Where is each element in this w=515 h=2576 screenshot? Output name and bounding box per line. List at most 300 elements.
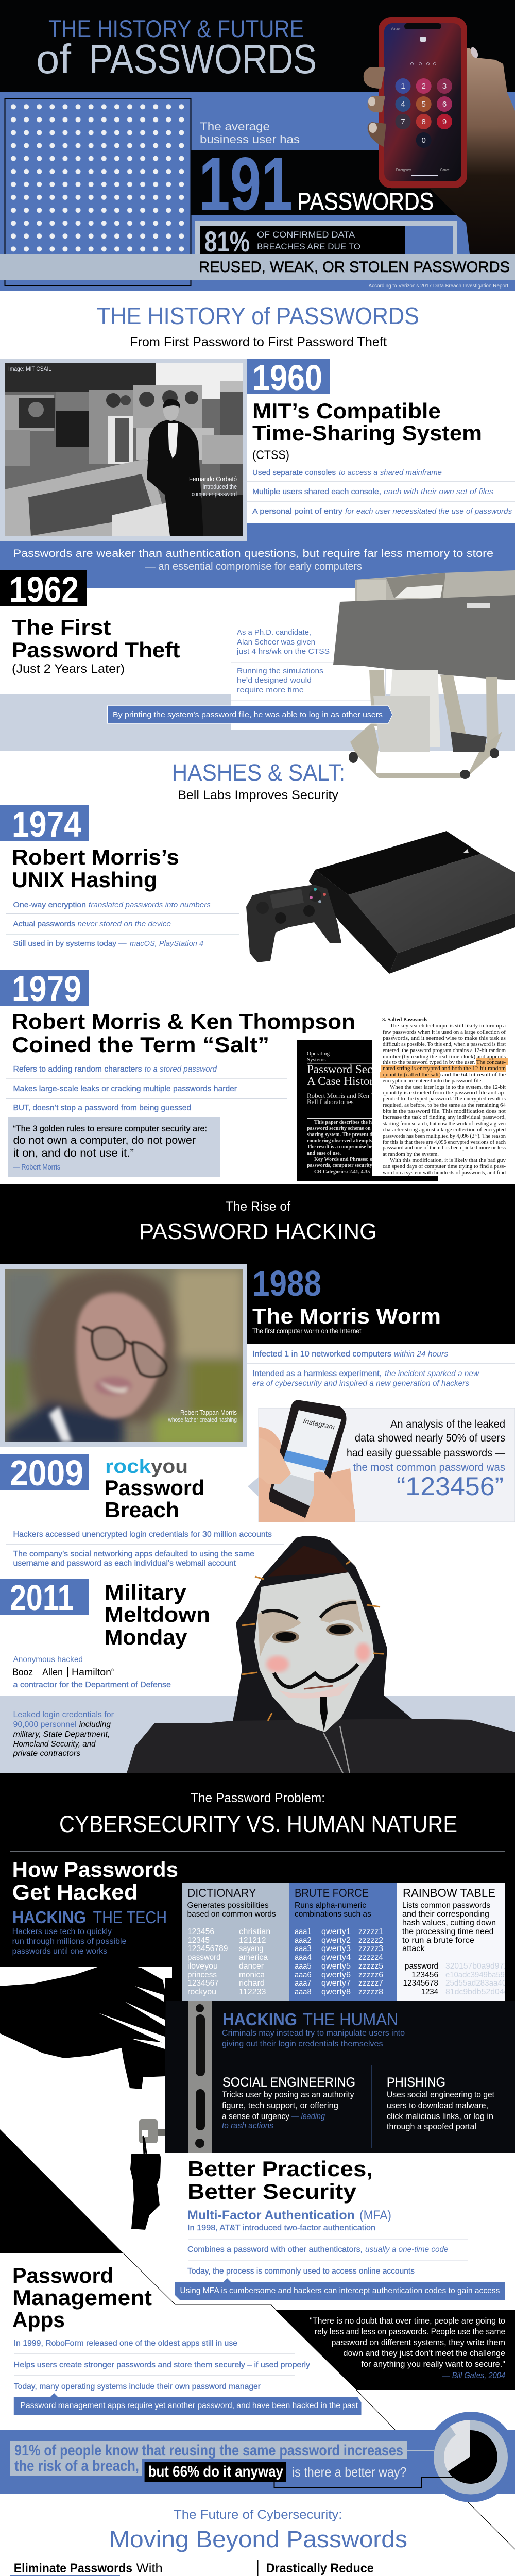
text: hacking the tech: [12, 1908, 167, 1956]
column: rainbow table: Lists common passwords: [402, 1901, 490, 1910]
bullets: mfa: usually a one-time code: [365, 2245, 449, 2254]
photo: hand holding phone: Instagram: [302, 1416, 336, 1431]
bullets: unix hashing: Still used in by systems today —: [13, 939, 127, 948]
photo: hand holding phone: [259, 1400, 355, 1522]
heading: cybersecurity vs human nature: CYBERSECURITY VS. HUMAN NATURE: [59, 1811, 457, 1837]
bullets: morris worm: era of cybersecurity and inspired a new generation of hackers: [252, 1379, 469, 1388]
column: brute force: aaa3: [295, 1944, 312, 1953]
quote: bill gates: password on different systems, they write them: [332, 2338, 505, 2347]
document: password security paper: passwords has been multiplied by 4,096 (2¹²). The reason: [383, 1133, 506, 1139]
document: password security paper: encryption are entered into the password file.: [383, 1078, 483, 1084]
document: password security paper: password security scheme on a remote: [307, 1126, 391, 1131]
bullets: ctss: Multiple users shared each console,: [252, 487, 381, 496]
heading: cybersecurity vs human nature: [59, 1791, 457, 1837]
stat text: 123456: An analysis of the leaked: [390, 1418, 505, 1430]
column: brute force: aaa4: [295, 1953, 312, 1962]
callout: mfa is cumbersome: Using MFA is cumbersome and hackers can intercept authentication codes to gain access: [180, 2286, 500, 2295]
document: password security paper: pended to the typed password. The encrypted result is: [383, 1096, 506, 1102]
bullets: password managers: Today, many operating systems include their own password manager: [14, 2382, 261, 2391]
panel: instagram leak stat: [248, 1400, 515, 1522]
panel: certificate-based authentication: Eliminate Passwords: [14, 2561, 132, 2575]
text: social engineering: [222, 2075, 355, 2130]
document: password security paper: starting from scratch, but now the work of testing a given: [383, 1121, 506, 1127]
caption: fernando corbato: [189, 476, 237, 498]
document: password security paper: A Case History: [307, 1075, 380, 1088]
document: password security paper: few passwords when it is used on a large collection of: [383, 1029, 506, 1036]
photo: smartphone lock screen: Emergency: [396, 168, 411, 172]
document: password security paper: When the user later logs in to the system, the 12-bit: [390, 1084, 506, 1090]
bullets: ctss: each with their own set of files: [384, 487, 494, 496]
column: dictionary: DICTIONARY: [187, 1886, 256, 1900]
heading: morris worm: 1988: [252, 1263, 321, 1303]
heading: coined salt: Robert Morris & Ken Thompson: [12, 1009, 355, 1033]
year badge: 1960: 1960: [252, 358, 322, 398]
caption: fernando corbato: computer password: [192, 490, 237, 498]
quote: robert morris: it on, and do not use it.”: [13, 1147, 134, 1159]
document: password security paper: Systems: [307, 1057, 326, 1063]
key and keychain: [130, 2119, 165, 2230]
bullets: rockyou: [6, 1530, 284, 1568]
heading: better practices better security: [187, 2157, 373, 2204]
photo: smartphone lock screen: 0: [422, 136, 426, 145]
document: password security paper: The key search technique is still likely to turn up a: [390, 1023, 506, 1029]
text: hacking the tech: run through millions of possible: [12, 1937, 127, 1946]
photo: smartphone lock screen: 1: [401, 82, 405, 91]
bullets: unix hashing: One-way encryption: [13, 901, 86, 909]
document: password security paper: [297, 1013, 515, 1181]
text: phishing: click malicious links, or log in: [387, 2112, 493, 2121]
heading: first password theft: The First: [12, 615, 111, 639]
column: brute force: Runs alpha-numeric: [295, 1901, 366, 1910]
text: hacking the human: HACKING: [222, 2010, 297, 2029]
column: rainbow table: RAINBOW TABLE: [403, 1886, 495, 1900]
title: of passwords: of: [36, 36, 72, 82]
heading: hashes and salt: [172, 759, 345, 802]
photo: smartphone lock screen: 3: [442, 82, 447, 91]
heading: unix hashing: [12, 845, 179, 892]
text: social engineering: figure, tech support, or offering: [222, 2101, 338, 2110]
text: phishing: through a spoofed portal: [387, 2122, 476, 2131]
text: anonymous hacked booz allen: [12, 1655, 171, 1689]
callout: printing the password file: [107, 706, 392, 723]
document: password security paper: nated string is encrypted and both the 12-bit random: [383, 1065, 506, 1072]
photo: anonymous mask hoodie: [127, 1536, 515, 1773]
quote: bill gates: down and they just don't meet the challenge: [343, 2349, 505, 2358]
logo: rockyou: you: [151, 1456, 188, 1478]
column: brute force: qwerty2: [321, 1936, 351, 1945]
photo credit: Image: MIT CSAIL: [8, 366, 52, 372]
column: dictionary: 121212: [239, 1936, 266, 1945]
heading: mit ctss: [252, 399, 482, 462]
year badge: 1979: 1979: [12, 969, 81, 1009]
column: brute force: qwerty8: [321, 1988, 351, 1996]
column: brute force: zzzzz1: [358, 1927, 383, 1936]
photo: smartphone lock screen: 2: [422, 82, 426, 91]
year badge: 1962: 1962: [9, 569, 79, 609]
heading: moving beyond passwords: The Future of Cybersecurity:: [174, 2507, 342, 2522]
text: hacking the human: THE HUMAN: [303, 2010, 399, 2029]
door plate: [188, 2001, 212, 2153]
photo: smartphone lock screen: [379, 17, 467, 188]
heading: password management apps: Apps: [12, 2308, 65, 2332]
document: password security paper: for this is that there are 4,096 encrypted versions of each: [383, 1139, 506, 1145]
heading: mit ctss: Time-Sharing System: [252, 421, 482, 445]
heading: how passwords get hacked: How Passwords: [12, 1857, 178, 1882]
text: the average business user has: The average: [200, 120, 270, 133]
heading: hashes and salt: HASHES & SALT:: [172, 759, 345, 786]
heading: better practices better security: Better Security: [187, 2179, 357, 2204]
bullets: rockyou: Hackers accessed unencrypted login credentials for 30 million accounts: [13, 1530, 272, 1539]
heading: morris worm: [252, 1263, 441, 1335]
text: anonymous hacked booz allen: Allen: [42, 1667, 63, 1678]
column: rainbow table: the processing time need: [402, 1927, 493, 1936]
text: phishing: Uses social engineering to get: [387, 2090, 494, 2099]
bullets: morris worm: the incident sparked a new: [385, 1369, 479, 1378]
column: brute force: zzzzz2: [358, 1936, 383, 1945]
heading: military meltdown monday: [105, 1580, 210, 1649]
document: password security paper: difficult as possible. To this end, when a password is first: [383, 1041, 506, 1047]
column: brute force: aaa8: [295, 1988, 312, 1996]
column: brute force: aaa7: [295, 1979, 312, 1988]
column: dictionary: password: [187, 1953, 220, 1962]
column: rainbow table: attack: [402, 1944, 425, 1953]
column: brute force: BRUTE FORCE: [295, 1886, 369, 1900]
heading: first password theft: (Just 2 Years Later): [12, 662, 125, 676]
column: dictionary: richard: [239, 1979, 265, 1988]
bullets: unix hashing: [6, 901, 239, 948]
text: phishing: PHISHING: [387, 2075, 445, 2090]
photo: smartphone lock screen: 8: [422, 117, 426, 126]
document: password security paper: passwords, computer security systems: [307, 1163, 390, 1168]
heading: better practices better security: Better Practices,: [187, 2157, 373, 2181]
bullets: salt: Makes large-scale leaks or cracking multiple passwords harder: [13, 1084, 237, 1093]
heading: password breach: [105, 1476, 204, 1522]
document: password security paper: required, as before, to be the same as the remaining 64: [383, 1102, 506, 1108]
column: dictionary: princess: [187, 1971, 217, 1979]
photo: smartphone lock screen: 9: [442, 117, 447, 126]
quote: robert morris: — Robert Morris: [13, 1163, 60, 1172]
text: anonymous hacked booz allen: Anonymous hacked: [13, 1655, 83, 1664]
panel: reuse statistic band: [0, 2412, 515, 2502]
text: leaked login credentials: 90,000 personnel: [13, 1720, 76, 1729]
stat text: 123456: “123456”: [397, 1472, 504, 1501]
bullets: ctss: A personal point of entry: [252, 507, 343, 516]
stat text: 123456: [347, 1418, 505, 1501]
bullets: unix hashing: never stored on the device: [77, 920, 171, 928]
stat: 81 percent of breaches: REUSED, WEAK, OR STOLEN PASSWORDS: [199, 259, 510, 276]
document: password security paper: Password Security:: [307, 1063, 398, 1076]
photo: smartphone lock screen: 7: [401, 117, 405, 126]
bullets: password managers: In 1999, RoboForm released one of the oldest apps still in use: [14, 2339, 237, 2348]
year badge: 1974: 1974: [12, 804, 81, 844]
document: password security paper: countering observed attempts to pen: [307, 1138, 387, 1144]
dot grid: 191 dots: [5, 98, 191, 286]
text: leaked login credentials: [13, 1710, 114, 1758]
document: password security paper: CR Categories: 2.41, 4.35: [314, 1169, 370, 1175]
document: password security paper: The result is a compromise between: [307, 1144, 386, 1150]
banner: memory compromise: Passwords are weaker than authentication questions, but require far less memory to store: [13, 548, 493, 560]
heading: password management apps: [12, 2263, 152, 2332]
document: password security paper: Robert Morris and Ken Thompson: [307, 1092, 400, 1099]
photo: smartphone lock screen: 5: [422, 100, 426, 109]
bullets: mfa: [187, 2245, 468, 2276]
column: brute force: qwerty6: [321, 1971, 351, 1979]
heading: moving beyond passwords: Moving Beyond Passwords: [109, 2526, 407, 2552]
banner: memory compromise: [0, 523, 515, 588]
caption: robert tappan morris: whose father created hashing: [168, 1416, 237, 1423]
bullets: password managers: Helps users create stronger passwords and store them securely – if used properly: [14, 2361, 310, 2369]
document: password security paper: number (by reading the real-time clock) and appends: [383, 1054, 506, 1060]
column: rainbow table: password: [405, 1962, 438, 1971]
stat frame: [195, 221, 457, 257]
text: hacking the tech: THE TECH: [93, 1908, 167, 1927]
bullets: mfa: Combines a password with other authenticators,: [187, 2245, 363, 2254]
text: anonymous hacked booz allen: Hamilton: [72, 1667, 111, 1678]
column: dictionary: christian: [239, 1927, 271, 1936]
column: brute force: qwerty1: [321, 1927, 351, 1936]
bullets: salt: to a stored password: [145, 1065, 217, 1074]
bullets: morris worm: [247, 1350, 515, 1388]
column: brute force: qwerty5: [321, 1962, 351, 1971]
column: dictionary: [187, 1886, 276, 1996]
text: hacking the tech: passwords until one works: [12, 1947, 107, 1956]
divider lines: diagonal: [123, 2253, 515, 2549]
card: alan scheer: require more time: [237, 686, 304, 694]
heading: cybersecurity vs human nature: The Password Problem:: [191, 1791, 325, 1805]
year badge: 2009: 2009: [10, 1453, 83, 1493]
panel: certificate-based authentication: With: [136, 2561, 163, 2575]
heading: coined salt: [12, 1009, 355, 1057]
column: brute force: zzzzz6: [358, 1971, 383, 1979]
document: password security paper: quantity (called the salt) and the 64-bit result of the: [383, 1072, 506, 1078]
column: brute force: zzzzz4: [358, 1953, 383, 1962]
bullets: morris worm: Intended as a harmless experiment,: [252, 1369, 382, 1378]
photo: playstation 4: [246, 831, 515, 974]
quote: bill gates: "There is no doubt that over time, people are going to: [310, 2316, 505, 2326]
column: dictionary: dancer: [239, 1962, 264, 1971]
stat text: 123456: data showed nearly 50% of users: [355, 1432, 505, 1444]
column: dictionary: 112233: [239, 1988, 266, 1996]
document: password security paper: sharing system. The present design: [307, 1132, 384, 1138]
stat text: 123456: the most common password was: [353, 1462, 505, 1473]
column: dictionary: 12345: [187, 1936, 210, 1945]
text: leaked login credentials: military, State Department,: [13, 1730, 110, 1739]
band: reused weak or stolen: [0, 254, 515, 280]
column: brute force: qwerty3: [321, 1944, 351, 1953]
stat: 81 percent of breaches: 81%: [204, 225, 250, 258]
column: dictionary: Generates possibilities: [187, 1901, 269, 1910]
panel: hero header: [0, 0, 515, 291]
column: brute force: zzzzz8: [358, 1988, 383, 1996]
heading: how passwords get hacked: Get Hacked: [12, 1880, 138, 1904]
heading: military meltdown monday: Meltdown: [105, 1602, 210, 1626]
heading: mit ctss: (CTSS): [252, 448, 289, 462]
text: leaked login credentials: Homeland Security, and: [13, 1740, 96, 1749]
column: rainbow table: [402, 1889, 505, 1994]
heading: password management apps: Management: [12, 2285, 152, 2310]
text: social engineering: a sense of urgency: [222, 2112, 290, 2121]
subheading: first password to first theft: From First Password to First Password Theft: [130, 335, 387, 349]
chart: pie of 91 and 66 percent: [425, 2412, 515, 2502]
text: hacking the tech: Hackers use tech to quickly: [12, 1927, 112, 1936]
bullets: mfa: Today, the process is commonly used to access online accounts: [187, 2267, 415, 2276]
panel: attack surface: Drastically Reduce: [266, 2561, 374, 2575]
text block: 91 percent know: 91% of people know that reusing the same password increases: [14, 2442, 403, 2459]
column: dictionary: 123456789: [187, 1944, 228, 1953]
caption: robert tappan morris: [168, 1409, 237, 1423]
document: password security paper: increase the task of finding any individual password,: [383, 1114, 506, 1121]
panel: cybersecurity vs human nature: [0, 1773, 515, 2253]
heading: unix hashing: Robert Morris’s: [12, 845, 179, 869]
quote: robert morris: “The 3 golden rules to ensure computer security are:: [13, 1124, 207, 1133]
text: leaked login credentials: including: [79, 1720, 111, 1729]
bullets: unix hashing: translated passwords into numbers: [89, 901, 211, 909]
source note: According to Verizon's 2017 Data Breach Investigation Report: [369, 283, 508, 289]
caption: fernando corbato: Fernando Corbató: [189, 476, 237, 483]
column: rainbow table: 12345678: [403, 1979, 438, 1988]
title: of passwords: PASSWORDS: [89, 36, 317, 82]
column: brute force: qwerty4: [321, 1953, 351, 1962]
document: password security paper: This paper describes the history: [314, 1120, 384, 1125]
stat: 191 passwords: [199, 142, 434, 226]
document: password security paper: Key Words and Phrases: operating: [314, 1157, 391, 1162]
text: social engineering: — leading: [291, 2112, 325, 2121]
column: brute force: qwerty7: [321, 1979, 351, 1988]
callout: printing the password file: By printing the system's password file, he was able to log in as other users: [113, 711, 383, 719]
photo: white door with hand silhouette: [0, 1961, 212, 2253]
bullets: password managers: [14, 2339, 310, 2391]
heading: hashes and salt: Bell Labs Improves Security: [178, 788, 338, 802]
panel: mainframe photo: [0, 359, 247, 541]
text: is there a better way: is there a better way?: [292, 2464, 407, 2480]
heading: password hacking: [139, 1199, 377, 1244]
heading: password breach: Breach: [105, 1498, 179, 1522]
quote: bill gates: — Bill Gates, 2004: [442, 2371, 505, 2380]
heading: password management apps: Password: [12, 2263, 113, 2287]
text: hacking the human: giving out their login credentials themselves: [222, 2040, 383, 2048]
column: rainbow table: to run a brute force: [402, 1936, 474, 1945]
heading: military meltdown monday: Military: [105, 1580, 187, 1604]
document: password security paper: With this modification, it is likely that the bad guy: [390, 1157, 506, 1163]
bullets: unix hashing: macOS, PlayStation 4: [130, 939, 203, 948]
heading: moving beyond passwords: [109, 2507, 407, 2552]
document: password security paper: word on a system with hundreds of passwords, and find: [383, 1170, 506, 1176]
text: the average business user has: business user has: [200, 133, 300, 146]
text block: 91 percent know: [10, 2441, 407, 2476]
heading: coined salt: Coined the Term “Salt”: [12, 1032, 269, 1057]
quote: bill gates: rely less and less on passwords. People use the same: [315, 2327, 505, 2336]
bullets: ctss: [247, 468, 515, 516]
heading: morris worm: The Morris Worm: [252, 1304, 441, 1328]
stat: 81 percent of breaches: [199, 225, 510, 276]
text: social engineering: SOCIAL ENGINEERING: [222, 2075, 355, 2090]
photo: fingers: [364, 46, 479, 147]
bullets: salt: Refers to adding random characters: [13, 1065, 142, 1074]
subheading: multi-factor authentication: (MFA): [359, 2208, 391, 2223]
text: hacking the human: Criminals may instead try to manipulate users into: [222, 2029, 405, 2038]
heading: the history of passwords: THE HISTORY of PASSWORDS: [97, 302, 419, 329]
column: dictionary: iloveyou: [187, 1962, 218, 1971]
column: brute force: aaa2: [295, 1936, 312, 1945]
photo: smartphone lock screen: Cancel: [440, 168, 450, 172]
photo: smartphone lock screen: 6: [442, 100, 447, 109]
bullets: salt: [6, 1065, 287, 1112]
stat: 191 passwords: 191: [199, 142, 293, 226]
logo: rockyou: rock: [105, 1456, 151, 1478]
text: social engineering: to rash actions: [222, 2121, 273, 2130]
stat band: 191: [191, 150, 467, 215]
bullets: ctss: Used separate consoles: [252, 468, 336, 477]
bullets: unix hashing: Actual passwords: [13, 920, 75, 928]
heading: how passwords get hacked: [12, 1857, 178, 1904]
document: password security paper: Operating: [307, 1050, 330, 1057]
column: rainbow table: hash values, cutting down: [402, 1919, 496, 1927]
document: password security paper: this to the password typed in by the user. The concate-: [383, 1059, 506, 1065]
callout: mfa is cumbersome: [175, 2278, 505, 2300]
bullets: rockyou: username and password as each individual’s webmail account: [13, 1559, 236, 1568]
photo: robert tappan morris: [0, 1264, 247, 1448]
column: brute force: zzzzz7: [358, 1979, 383, 1988]
column: rainbow table: and their corresponding: [402, 1910, 489, 1919]
document: password security paper: character string against a large collection of encrypted: [383, 1127, 506, 1133]
subheading: multi-factor authentication: [187, 2208, 391, 2232]
bullets: ctss: for each user necessitated the use of passwords: [345, 507, 512, 516]
bullets: rockyou: The company’s social networking apps defaulted to using the same: [13, 1550, 254, 1558]
quote: robert morris: do not own a computer, do not power: [13, 1134, 196, 1146]
quote: bill gates: [275, 2310, 515, 2390]
table: attack types: [182, 1883, 515, 2001]
column: brute force: zzzzz5: [358, 1962, 383, 1971]
band: light blue: [0, 1696, 515, 1773]
card: alan scheer: Running the simulations: [237, 667, 323, 675]
panel: certificate-based authentication: [6, 2561, 249, 2576]
panel: rise of password hacking: [0, 1184, 515, 1448]
bullets: ctss: to access a shared mainframe: [339, 468, 442, 477]
heading: military meltdown monday: Monday: [105, 1625, 187, 1649]
column: brute force: combinations such as: [295, 1910, 371, 1919]
card: alan scheer: Alan Scheer was given: [237, 638, 315, 647]
photo: smartphone lock screen: 4: [401, 100, 405, 109]
document: password security paper: 3. Salted Passwords: [382, 1016, 428, 1023]
text: anonymous hacked booz allen: a contractor for the Department of Defense: [13, 1681, 171, 1689]
column: dictionary: based on common words: [187, 1910, 276, 1919]
panel: better practices: [175, 2157, 505, 2300]
column: brute force: [295, 1886, 383, 1996]
subheading: multi-factor authentication: In 1998, AT&T introduced two-factor authentication: [187, 2224, 375, 2232]
column: dictionary: monica: [239, 1971, 265, 1979]
heading: password hacking: The Rise of: [226, 1199, 290, 1214]
column: brute force: aaa6: [295, 1971, 312, 1979]
card: alan scheer: [231, 624, 385, 730]
column: brute force: zzzzz3: [358, 1944, 383, 1953]
title: the history and future: THE HISTORY & FUTURE: [48, 15, 304, 42]
column: rainbow table: 1234: [421, 1988, 438, 1996]
text: leaked login credentials: private contractors: [13, 1749, 80, 1758]
column: rainbow table: 123456: [411, 1971, 438, 1979]
band: light blue: [0, 694, 515, 751]
heading: first password theft: [12, 615, 180, 676]
text: hacking the human: [222, 2010, 405, 2048]
heading: first password theft: Password Theft: [12, 638, 180, 662]
heading: password breach: Password: [105, 1476, 204, 1500]
text block: 91 percent know: the risk of a breach,: [14, 2458, 139, 2475]
document: password security paper: can spend days of computer time trying to find a pass-: [383, 1163, 506, 1170]
stat: 81 percent of breaches: BREACHES ARE DUE TO: [257, 242, 360, 251]
callout: password apps hacked: Password management apps require yet another password, and have been hacked in the past: [21, 2401, 358, 2410]
text: hacking the tech: HACKING: [12, 1908, 86, 1927]
column: dictionary: 123456: [187, 1927, 214, 1936]
document: password security paper: password and one of them has been picked more or less: [383, 1145, 506, 1151]
